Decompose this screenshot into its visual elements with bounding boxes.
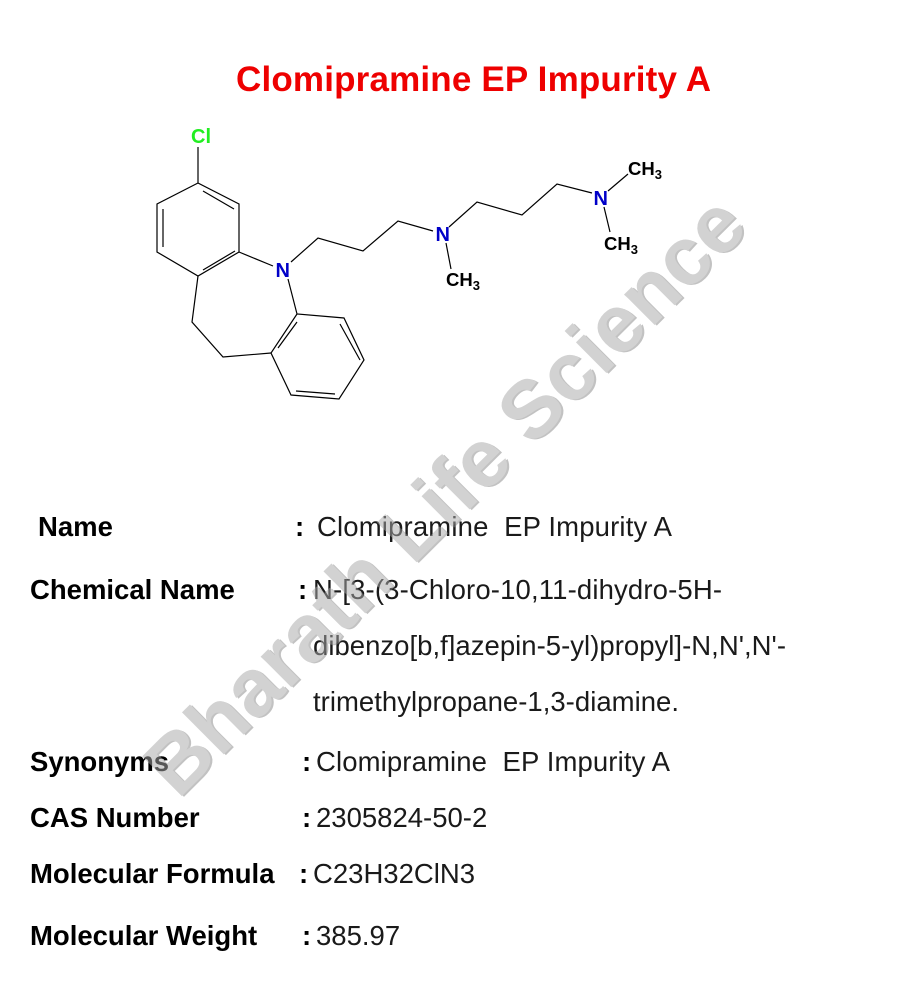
- details: chemical name: N-[3-(3-Chloro-10,11-dihydro-5H-: [313, 574, 722, 605]
- details: CAS number: :: [302, 802, 311, 833]
- details: molecular weight: :: [302, 920, 311, 951]
- details: CAS number: CAS Number: [30, 802, 200, 833]
- group: lower CH3: CH: [604, 233, 631, 254]
- details: chemical name: Chemical Name: [30, 574, 235, 605]
- details: molecular weight: 385.97: [316, 920, 400, 951]
- details: molecular formula: Molecular Formula: [30, 858, 275, 889]
- group: upper CH3: CH: [628, 158, 655, 179]
- watermark: Bharath Life Science: [129, 179, 765, 813]
- bonds: [157, 147, 628, 399]
- details: name: :: [295, 511, 304, 542]
- chemical structure: [157, 126, 662, 399]
- details: CAS number: 2305824-50-2: [316, 802, 487, 833]
- details: molecular formula: :: [299, 858, 308, 889]
- atom: terminal N: N: [594, 188, 608, 210]
- title: Clomipramine EP Impurity A: [236, 60, 711, 99]
- atom: Cl: Cl: [191, 126, 211, 148]
- details: synonyms: Clomipramine EP Impurity A: [316, 746, 671, 777]
- details: molecular formula: [30, 858, 475, 889]
- details: chemical name: trimethylpropane-1,3-diamine.: [313, 686, 679, 717]
- details: synonyms: [30, 746, 671, 777]
- group: upper CH3: 3: [655, 167, 662, 182]
- group: lower CH3: 3: [631, 242, 638, 257]
- details: chemical name: :: [298, 574, 307, 605]
- details: chemical name: [30, 574, 786, 717]
- group: middle CH3: 3: [473, 278, 480, 293]
- details: name: [38, 511, 673, 542]
- details: chemical name: dibenzo[b,f]azepin-5-yl)propyl]-N,N',N'-: [313, 630, 786, 661]
- atom: ring N: N: [276, 260, 290, 282]
- atom: middle N: N: [436, 224, 450, 246]
- details: synonyms: :: [302, 746, 311, 777]
- details: molecular weight: Molecular Weight: [30, 920, 257, 951]
- details: name: Name: [38, 511, 113, 542]
- details: name: Clomipramine EP Impurity A: [317, 511, 673, 542]
- details: CAS number: [30, 802, 487, 833]
- details: molecular weight: [30, 920, 400, 951]
- details: molecular formula: C23H32ClN3: [313, 858, 475, 889]
- watermark: Bharath Life Science: [126, 178, 763, 813]
- group: middle CH3: CH: [446, 269, 473, 290]
- details: synonyms: Synonyms: [30, 746, 169, 777]
